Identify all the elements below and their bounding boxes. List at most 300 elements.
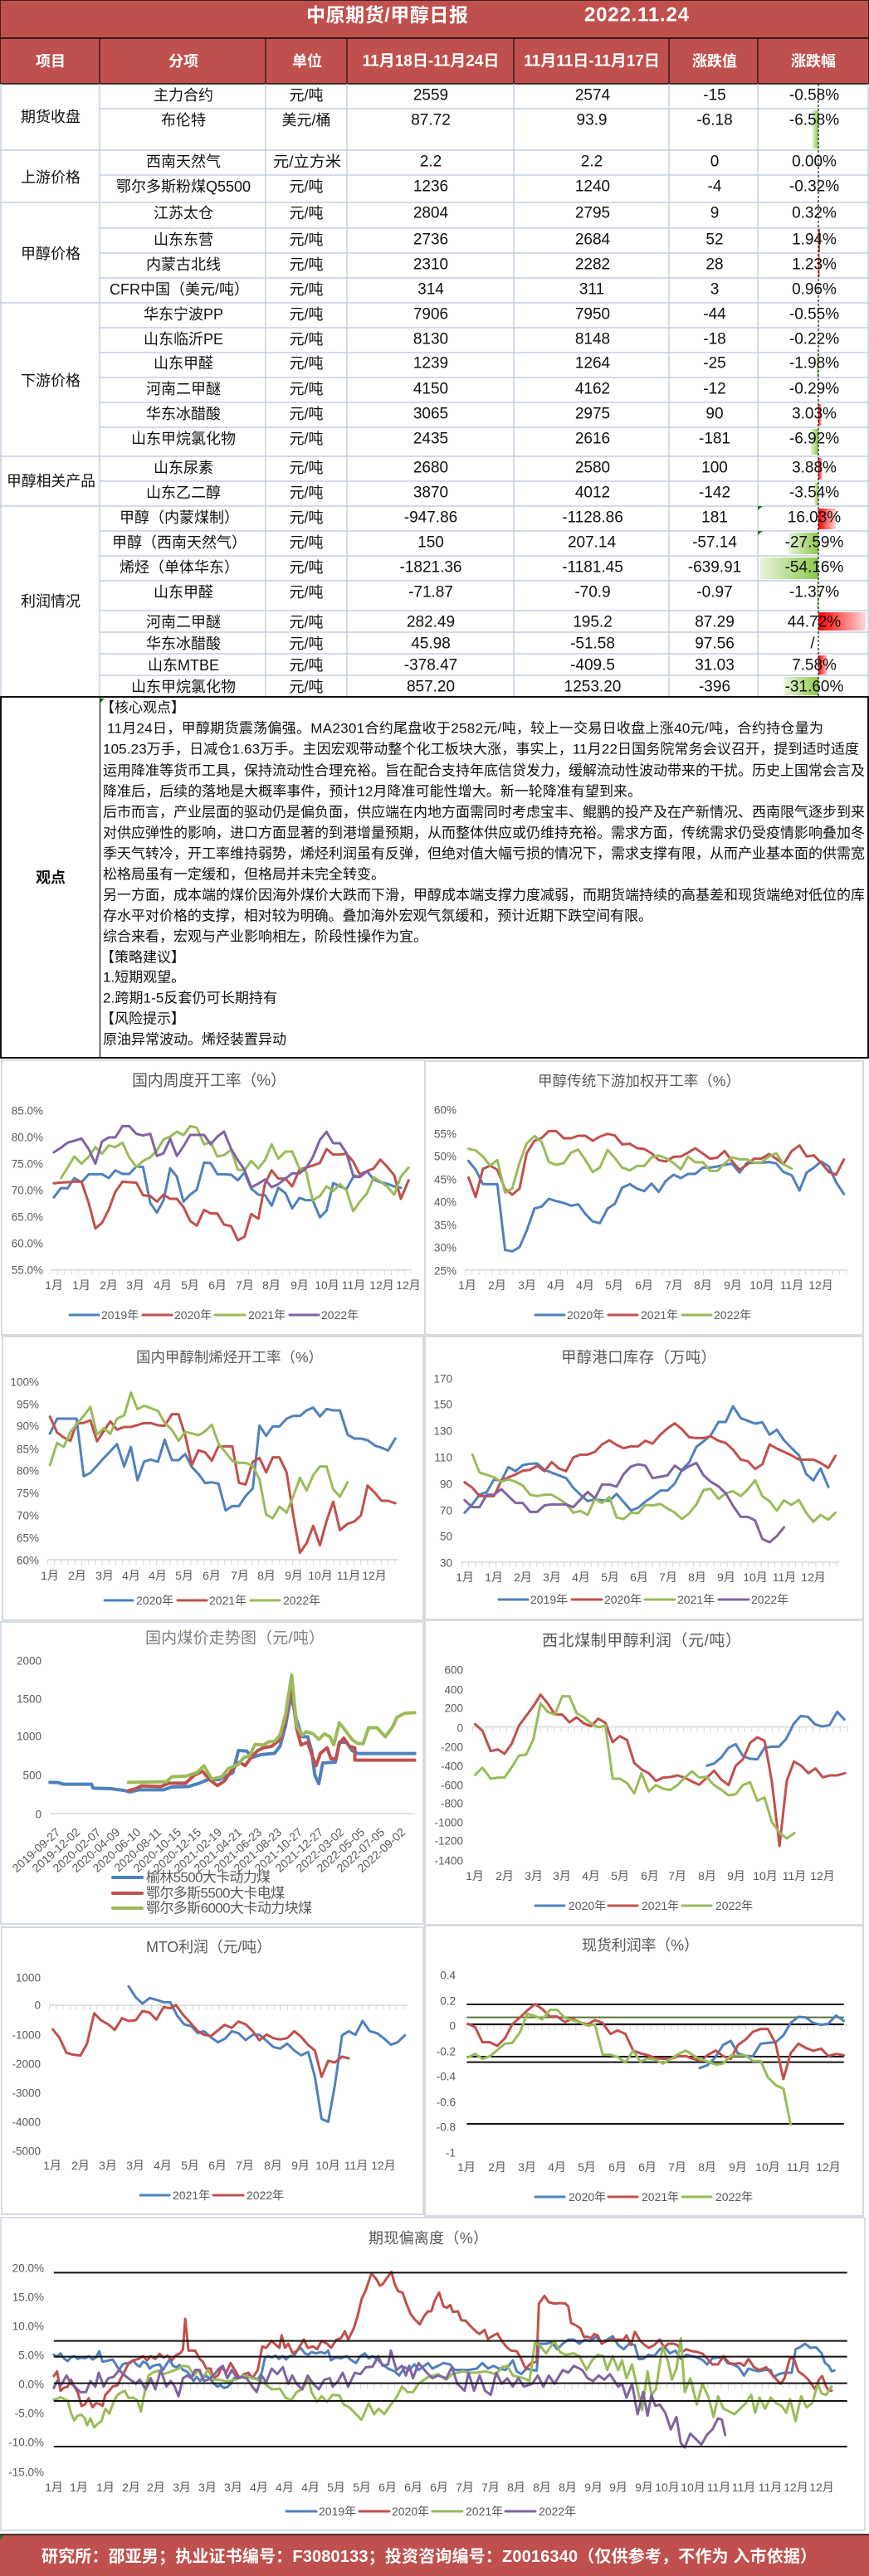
unit column: 元/吨 <box>289 679 324 695</box>
x axis with rotated dates: 2022-09-02 <box>354 1825 408 1875</box>
footer banner: 研究所：邵亚男；执业证书编号：F3080133；投资咨询编号：Z0016340（仅供参考，不作为 入市依据） <box>41 2546 817 2566</box>
y axis labels: 55% <box>434 1128 456 1140</box>
x axis: 4月 <box>149 1569 167 1582</box>
legend: 2022年 <box>715 2190 753 2203</box>
chart title: 国内煤价走势图（元/吨） <box>145 1629 325 1648</box>
x axis: 8月 <box>262 1278 281 1292</box>
y axis labels: 85.0% <box>12 1105 43 1117</box>
x axis: 6月 <box>378 2481 397 2494</box>
unit column: 元/吨 <box>289 406 324 422</box>
x axis: 11月 <box>342 1278 365 1292</box>
current week values: 314 <box>417 280 444 299</box>
row labels: 河南二甲醚 <box>146 381 221 397</box>
y axis labels: 65.0% <box>12 1211 43 1223</box>
row labels: 山东甲醛 <box>154 355 213 372</box>
x axis: 9月 <box>635 2481 653 2494</box>
unit column: 元/吨 <box>289 178 324 195</box>
change values: -18 <box>703 330 726 348</box>
previous week values: 2282 <box>575 256 610 274</box>
chart title: 西北煤制甲醇利润（元/吨） <box>542 1631 741 1649</box>
row labels: 山东甲烷氯化物 <box>131 431 236 447</box>
x axis <box>456 1562 839 1584</box>
y axis labels: -3000 <box>12 2087 41 2099</box>
y axis labels: -1 <box>446 2147 456 2159</box>
change percentages: -31.60% <box>785 679 843 695</box>
y axis labels <box>434 1103 456 1278</box>
view text block: 运用降准等货币工具，保持流动性合理充裕。旨在配合支持年底信贷发力，缓解流动性波动带来的干扰。历史上国常会言及 <box>103 763 865 778</box>
unit column: 元/吨 <box>289 431 324 447</box>
x axis: 5月 <box>578 2160 596 2174</box>
row labels: 山东东营 <box>154 231 213 248</box>
x axis: 4月 <box>582 1869 600 1882</box>
x axis: 3月 <box>126 1278 144 1292</box>
current week values: 857.20 <box>407 679 455 695</box>
y axis labels: 75% <box>17 1487 39 1500</box>
x axis: 3月 <box>126 2159 144 2172</box>
legend: 2022年 <box>321 1308 359 1322</box>
chart: MTO profit <box>2 1927 423 2214</box>
x axis: 5月 <box>605 1278 623 1292</box>
chart: traditional downstream weighted operating rate <box>425 1061 863 1335</box>
x axis: 4月 <box>154 2159 172 2172</box>
x axis: 8月 <box>698 1869 716 1882</box>
legend: 2022年 <box>247 2189 284 2202</box>
unit column: 元/吨 <box>289 460 324 476</box>
legend: 2022年 <box>714 1308 751 1322</box>
y axis labels <box>12 1105 43 1276</box>
x axis: 10月 <box>749 1278 774 1292</box>
change values: -0.97 <box>696 584 733 601</box>
x axis: 3月 <box>95 1569 114 1582</box>
x axis: 5月 <box>601 1570 619 1584</box>
table header row: 11月18日-11月24日 <box>363 53 499 70</box>
x axis: 2月 <box>100 1278 118 1292</box>
current week values: 45.98 <box>411 635 451 652</box>
change values: 181 <box>701 509 728 526</box>
x axis: 12月 <box>371 2159 396 2172</box>
row labels: 山东甲烷氯化物 <box>131 679 236 695</box>
x axis: 4月 <box>547 1278 565 1292</box>
x axis: 3月 <box>553 1869 571 1882</box>
x axis: 6月 <box>404 2481 422 2494</box>
y axis labels: 45% <box>434 1173 456 1186</box>
change values: -44 <box>703 305 726 324</box>
x axis with rotated dates: 2021-12-27 <box>272 1825 326 1875</box>
change values: 9 <box>710 204 719 222</box>
table header row: 11月11日-11月17日 <box>524 53 660 70</box>
category labels: 上游价格 <box>21 169 81 186</box>
legend: 2020年 <box>569 2190 606 2203</box>
change percentages: 44.72% <box>788 614 841 631</box>
x axis: 12月 <box>801 1570 826 1584</box>
unit column: 元/立方米 <box>273 153 341 170</box>
view text block: 2.跨期1-5反套仍可长期持有 <box>103 991 277 1006</box>
y axis labels: -1000 <box>434 1817 463 1829</box>
previous week values: -1181.45 <box>562 559 623 576</box>
previous week values: 1240 <box>575 178 610 196</box>
x axis: 2月 <box>68 1569 86 1582</box>
y axis labels: 95% <box>17 1399 39 1410</box>
y axis labels: -5.0% <box>15 2408 44 2419</box>
x axis: 10月 <box>655 2481 680 2494</box>
x axis: 7月 <box>481 2481 500 2494</box>
unit column: 元/吨 <box>289 584 324 601</box>
y axis labels: 110 <box>434 1452 452 1463</box>
row labels: 河南二甲醚 <box>146 614 221 631</box>
x axis: 4月 <box>276 2481 294 2494</box>
y axis labels: 40% <box>434 1196 456 1208</box>
y axis labels <box>10 1376 39 1566</box>
x axis: 6月 <box>630 1570 648 1584</box>
x axis: 8月 <box>264 2159 282 2172</box>
legend <box>535 1308 751 1322</box>
change values: 28 <box>705 256 724 274</box>
x axis: 6月 <box>203 1569 221 1582</box>
previous week values: 2795 <box>575 204 610 222</box>
x axis with rotated dates: 2021-08-23 <box>231 1825 285 1875</box>
category labels: 甲醇价格 <box>21 246 81 262</box>
x axis: 5月 <box>175 1569 193 1582</box>
x axis: 2月 <box>488 2160 506 2174</box>
current week values: 2804 <box>413 204 449 222</box>
x axis with rotated dates: 2020-10-15 <box>130 1825 184 1875</box>
chart: MTO olefin operating rate <box>2 1337 423 1620</box>
unit column: 元/吨 <box>289 87 324 104</box>
x axis: 5月 <box>181 2159 199 2172</box>
x axis: 12月 <box>784 2481 808 2494</box>
row labels: 江苏太仓 <box>154 205 213 222</box>
x axis with rotated dates: 2021-04-21 <box>191 1825 245 1875</box>
y axis labels: 0.4 <box>440 1970 456 1981</box>
current week values: 2310 <box>413 256 448 274</box>
x axis: 12月 <box>369 1278 394 1292</box>
previous week values: 8148 <box>575 330 610 348</box>
current week values: 1236 <box>413 178 448 196</box>
x axis: 10月 <box>681 2481 705 2494</box>
x axis: 11月 <box>783 1869 806 1882</box>
x axis: 1月 <box>96 2481 115 2494</box>
view text block: 综合来看，宏观与产业影响相左，阶段性操作为宜。 <box>103 929 427 944</box>
chart: domestic weekly operating rate <box>2 1060 425 1335</box>
table header row: 涨跌值 <box>692 53 737 70</box>
x axis <box>45 1270 421 1292</box>
x axis: 6月 <box>208 2159 227 2172</box>
x axis: 6月 <box>608 2160 627 2174</box>
current week values: 7906 <box>413 305 448 324</box>
legend: 2021年 <box>641 1308 678 1322</box>
x axis: 9月 <box>609 2481 627 2494</box>
legend <box>499 1593 788 1606</box>
x axis: 12月 <box>362 1569 387 1582</box>
x axis with rotated dates <box>9 1814 415 1875</box>
change percentages: -3.54% <box>789 485 839 501</box>
category labels: 下游价格 <box>21 373 81 389</box>
x axis: 7月 <box>665 1278 683 1292</box>
change percentages: -0.32% <box>789 178 839 196</box>
change values: -57.14 <box>692 534 737 551</box>
previous week values: -409.5 <box>570 657 615 674</box>
view text block: 1.短期观望。 <box>103 969 185 986</box>
x axis: 5月 <box>353 2481 371 2494</box>
chart title: 期现偏离度（%） <box>369 2230 488 2247</box>
legend: 2021年 <box>209 1594 247 1607</box>
legend: 2021年 <box>466 2505 503 2518</box>
panel: market view <box>1 697 868 1058</box>
legend: 榆林5500大卡动力煤 <box>146 1870 271 1885</box>
y axis labels: 10.0% <box>12 2320 44 2333</box>
x axis: 12月 <box>809 2481 834 2494</box>
change percentages: 3.88% <box>792 460 837 476</box>
y axis labels: 0 <box>35 1809 41 1820</box>
x axis: 7月 <box>231 1569 249 1582</box>
change percentages: -54.16% <box>785 559 843 576</box>
y axis labels: -5000 <box>12 2145 41 2157</box>
row labels: 烯烃（单体华东） <box>120 559 239 576</box>
change values: -639.91 <box>688 559 741 576</box>
legend: 2022年 <box>539 2505 576 2518</box>
x axis: 1月 <box>45 2481 63 2494</box>
legend: 2022年 <box>751 1593 788 1606</box>
chart title: 甲醇传统下游加权开工率（%） <box>538 1073 740 1089</box>
x axis: 3月 <box>518 1278 536 1292</box>
x axis: 9月 <box>717 1570 735 1584</box>
current week values: 150 <box>417 534 444 551</box>
x axis: 2月 <box>122 2481 140 2494</box>
current week values: -947.86 <box>404 509 457 526</box>
x axis: 3月 <box>173 2481 191 2494</box>
y axis labels: 60% <box>17 1555 39 1566</box>
category labels <box>7 109 95 610</box>
y axis labels <box>8 2262 44 2479</box>
x axis: 10月 <box>315 2159 340 2172</box>
y axis labels: 50 <box>440 1530 452 1543</box>
x axis: 8月 <box>698 2160 716 2174</box>
previous week values: 1253.20 <box>564 679 621 695</box>
row labels: 主力合约 <box>154 87 213 104</box>
change values: 3 <box>710 280 719 299</box>
x axis: 12月 <box>396 1278 421 1292</box>
y axis labels: 0 <box>34 1999 41 2011</box>
change percentages: 7.58% <box>792 657 837 674</box>
y axis labels: -1200 <box>434 1835 463 1847</box>
x axis: 1月 <box>458 1278 476 1292</box>
view text block: 松格局虽有一定缓和，但格局并未完全转变。 <box>103 866 385 883</box>
x axis: 4月 <box>250 2481 268 2494</box>
x axis: 9月 <box>290 1278 309 1292</box>
x axis: 9月 <box>724 1278 742 1292</box>
row labels: CFR中国（美元/吨） <box>110 281 249 298</box>
y axis labels: 80% <box>17 1465 39 1477</box>
x axis: 8月 <box>694 1278 712 1292</box>
change percentages: 1.94% <box>792 231 837 249</box>
previous week values: -1128.86 <box>562 509 623 526</box>
x axis: 1月 <box>70 2481 88 2494</box>
x axis with rotated dates: 2021-02-19 <box>171 1825 225 1875</box>
x axis with rotated dates: 2022-05-05 <box>314 1825 368 1875</box>
data lines <box>52 1986 405 2122</box>
chart title: 国内甲醇制烯烃开工率（%） <box>136 1349 323 1366</box>
change percentages: 1.23% <box>792 256 837 274</box>
x axis: 1月 <box>41 1569 59 1582</box>
x axis: 10月 <box>753 1869 778 1882</box>
row labels: 华东宁波PP <box>144 306 223 323</box>
change percentages: -1.37% <box>789 584 839 601</box>
chart: northwest coal-to-methanol profit <box>425 1620 863 1925</box>
category labels: 期货收盘 <box>21 109 81 125</box>
legend: 2021年 <box>642 2190 679 2203</box>
y axis labels: 1000 <box>16 1971 41 1984</box>
x axis: 6月 <box>430 2481 448 2494</box>
previous week values <box>562 86 623 695</box>
current week values <box>399 86 462 695</box>
y axis labels: 2000 <box>17 1654 41 1668</box>
x axis: 8月 <box>559 2481 577 2494</box>
x axis: 3月 <box>224 2481 242 2494</box>
change values <box>688 86 741 695</box>
row labels: 山东甲醛 <box>154 584 213 601</box>
y axis labels <box>12 1971 41 2157</box>
unit column: 元/吨 <box>289 485 324 501</box>
change percentages: -0.22% <box>789 330 839 348</box>
legend: 鄂尔多斯5500大卡电煤 <box>146 1885 285 1902</box>
unit column: 元/吨 <box>289 509 324 526</box>
x axis: 4月 <box>548 2160 566 2174</box>
unit column: 元/吨 <box>289 256 324 273</box>
x axis: 8月 <box>533 2481 551 2494</box>
unit column: 元/吨 <box>289 231 324 248</box>
legend: 2021年 <box>677 1593 715 1606</box>
change percentages: 16.03% <box>788 509 841 526</box>
change values: 87.29 <box>695 614 735 631</box>
change values: 31.03 <box>695 657 735 674</box>
legend: 2020年 <box>604 1593 642 1606</box>
x axis: 9月 <box>729 2160 747 2174</box>
row labels: 山东尿素 <box>154 460 213 476</box>
unit column: 元/吨 <box>289 614 324 631</box>
y axis labels: -15.0% <box>8 2466 44 2479</box>
y axis labels: 500 <box>22 1769 41 1782</box>
title banner: 中原期货/甲醇日报 <box>306 4 468 26</box>
x axis: 5月 <box>181 1278 199 1292</box>
previous week values: 195.2 <box>573 614 613 631</box>
y axis labels <box>17 1654 41 1820</box>
row labels: 山东临沂PE <box>144 331 223 348</box>
table header row <box>0 38 869 84</box>
x axis: 4月 <box>154 1278 172 1292</box>
data lines <box>50 1675 415 1792</box>
category labels: 利润情况 <box>21 593 81 610</box>
x axis: 3月 <box>543 1570 561 1584</box>
y axis labels <box>434 1664 463 1867</box>
current week values: 282.49 <box>407 614 455 631</box>
change percentages: -6.92% <box>789 430 839 448</box>
y axis labels: 25% <box>434 1264 456 1278</box>
previous week values: 93.9 <box>577 111 607 129</box>
previous week values: 2975 <box>575 405 610 423</box>
y axis labels: 200 <box>444 1702 463 1714</box>
legend: 2022年 <box>715 1899 753 1912</box>
change values: 100 <box>701 460 728 476</box>
x axis: 9月 <box>285 1569 303 1582</box>
legend <box>535 1899 753 1912</box>
y axis labels <box>433 1372 452 1570</box>
x axis: 7月 <box>668 2160 686 2174</box>
y axis labels: 170 <box>433 1372 452 1385</box>
change percentages: -0.29% <box>789 380 839 398</box>
view text block: 对供应弹性的影响，进口方面显著的到港增量预期，从而整体供应或仍维持充裕。需求方面，传统需求仍受疫情影响叠加冬 <box>103 825 865 841</box>
change percentages: -0.58% <box>789 86 839 105</box>
chart: spot profit margin <box>425 1926 863 2216</box>
previous week values: 4012 <box>575 485 610 501</box>
x axis: 7月 <box>236 2159 254 2172</box>
view text block: 后市而言，产业层面的驱动仍是偏负面，供应端在内地方面需同时考虑宝丰、鲲鹏的投产及在产新情况、西南限气逐步到来 <box>103 805 865 820</box>
unit column: 元/吨 <box>289 281 324 298</box>
x axis: 4月 <box>576 1278 594 1292</box>
table header row: 单位 <box>292 52 322 70</box>
x axis: 11月 <box>773 1570 796 1584</box>
data lines and reference lines <box>466 2004 844 2125</box>
view text block: 季天气转冷，开工率维持弱势，烯烃利润虽有反弹，但绝对值大幅亏损的情况下，需求支撑有限，从而产业基本面的供需宽 <box>103 846 865 861</box>
x axis: 5月 <box>611 1869 629 1882</box>
footer banner <box>0 2535 869 2576</box>
x axis: 12月 <box>816 2160 841 2174</box>
unit column: 元/吨 <box>289 331 324 348</box>
x axis: 9月 <box>727 1869 745 1882</box>
legend: 鄂尔多斯6000大卡动力块煤 <box>146 1900 312 1916</box>
legend <box>70 1308 359 1322</box>
previous week values: 2684 <box>575 231 611 249</box>
y axis labels: -10.0% <box>8 2436 44 2449</box>
x axis with rotated dates: 2022-03-02 <box>293 1825 347 1875</box>
x axis: 8月 <box>257 1569 276 1582</box>
table header row: 涨跌幅 <box>791 53 836 70</box>
x axis: 1月 <box>72 1278 90 1292</box>
data lines <box>50 1393 395 1553</box>
x axis <box>457 2025 847 2174</box>
y axis labels: 130 <box>433 1425 452 1437</box>
y axis labels: 100% <box>10 1376 39 1389</box>
current week values: 1239 <box>413 355 448 372</box>
x axis <box>45 2387 834 2494</box>
current week values: 2680 <box>413 460 448 476</box>
x axis with rotated dates: 2022-07-05 <box>334 1825 388 1875</box>
y axis labels: -400 <box>441 1760 463 1772</box>
category labels: 甲醇相关产品 <box>7 473 95 489</box>
y axis labels: -1000 <box>12 2029 41 2041</box>
data lines <box>54 1126 408 1240</box>
x axis: 12月 <box>810 1869 835 1882</box>
previous week values: 2616 <box>575 430 610 448</box>
legend: 2020年 <box>567 1308 604 1322</box>
unit column: 美元/桶 <box>281 112 331 129</box>
y axis labels: 30 <box>440 1556 452 1570</box>
previous week values: -70.9 <box>574 584 611 601</box>
view text block: 【风险提示】 <box>100 1010 185 1027</box>
previous week values: 1264 <box>575 355 611 372</box>
x axis <box>43 2005 408 2172</box>
change values: 97.56 <box>695 635 735 652</box>
x axis: 3月 <box>99 2159 117 2172</box>
y axis labels: 0.0% <box>18 2378 44 2391</box>
y axis labels: 15.0% <box>12 2291 44 2303</box>
x axis: 2月 <box>147 2481 165 2494</box>
y axis labels: 60% <box>434 1103 456 1117</box>
x axis: 6月 <box>638 2160 657 2174</box>
legend: 2019年 <box>530 1593 568 1606</box>
previous week values: 207.14 <box>568 534 616 551</box>
x axis: 9月 <box>291 2159 310 2172</box>
data lines <box>475 1695 845 1846</box>
